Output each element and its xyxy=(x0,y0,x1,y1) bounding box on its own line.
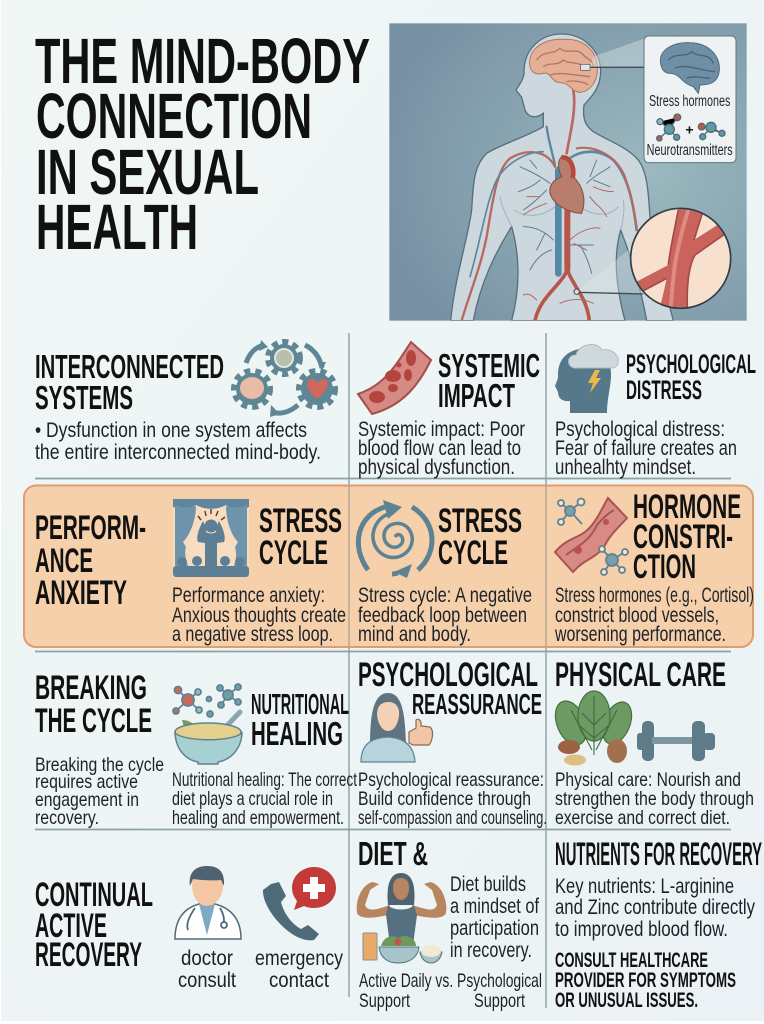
body text: Performance anxiety: xyxy=(172,583,325,607)
title: IN SEXUAL xyxy=(36,136,259,208)
body text: engagement in xyxy=(35,789,139,811)
heading: RECOVERY xyxy=(35,936,142,974)
heart xyxy=(550,157,584,213)
heading: CTION xyxy=(633,548,696,586)
icon: blood vessel xyxy=(358,342,431,414)
label: doctor consult: doctor xyxy=(181,946,233,970)
title: HEALTH xyxy=(36,191,198,263)
brain xyxy=(530,39,597,92)
heading xyxy=(626,349,756,405)
comparison labels: Active Daily vs. Psychological xyxy=(359,970,542,992)
zoom: artery close-up xyxy=(631,207,731,310)
heading: STRESS xyxy=(438,502,522,540)
icon: constricted vessel with molecules xyxy=(555,498,628,575)
heading: PERFORM- xyxy=(35,509,146,547)
heading xyxy=(35,348,224,416)
inset: stress hormones and neurotransmitters: Stress hormones xyxy=(649,93,731,110)
icon: gears brain heart xyxy=(234,340,335,417)
panel: nutritional healing: NUTRITIONAL xyxy=(251,689,349,721)
panel: continual active recovery xyxy=(35,866,343,992)
comparison labels: Support xyxy=(474,990,525,1012)
body text: Anxious thoughts create xyxy=(172,603,346,627)
body text xyxy=(555,417,737,479)
panel: interconnected systems xyxy=(35,340,335,464)
body text: Breaking the cycle xyxy=(35,754,164,776)
icon: dumbbell xyxy=(637,721,715,761)
body text: feedback loop between xyxy=(358,603,527,627)
heading xyxy=(35,509,146,612)
panel: diet and mindset xyxy=(357,835,542,1012)
body text: requires active xyxy=(35,771,138,793)
panel: performance anxiety highlight band xyxy=(24,486,754,652)
heading: SYSTEMIC xyxy=(438,347,540,384)
body text: Build confidence through xyxy=(358,788,531,810)
body text xyxy=(358,417,525,479)
panel: physical care xyxy=(549,656,754,829)
heading xyxy=(633,488,741,586)
body text: Stress cycle: A negative xyxy=(358,583,532,607)
comparison labels: Support xyxy=(359,990,410,1012)
heading: INTERCONNECTED xyxy=(35,348,224,385)
body text: unhealhty mindset. xyxy=(555,455,696,479)
heading xyxy=(35,669,152,740)
heading: REASSURANCE xyxy=(412,689,542,721)
heading xyxy=(358,656,542,721)
inset: stress hormones and neurotransmitters xyxy=(644,36,736,163)
comparison labels xyxy=(359,970,542,1012)
icon: molecules and bowl xyxy=(173,684,242,764)
icon: head with storm cloud xyxy=(555,345,618,413)
body text: Diet builds xyxy=(450,872,526,896)
title: CONNECTION xyxy=(36,80,312,152)
icon: doctor xyxy=(175,866,241,939)
body text: a negative stress loop. xyxy=(172,622,333,646)
panel: psychological distress xyxy=(555,345,756,479)
heading: DIET & xyxy=(358,835,428,872)
heading: THE CYCLE xyxy=(35,702,152,740)
icon: spinach and nuts xyxy=(549,691,637,766)
body text xyxy=(555,769,754,829)
body silhouette xyxy=(451,34,673,321)
label: emergency contact xyxy=(255,946,343,992)
heading: CYCLE xyxy=(438,534,508,572)
icon: person on stage xyxy=(173,499,249,577)
body text: Nutritional healing: The correct xyxy=(172,769,357,791)
body text: diet plays a crucial role in xyxy=(172,788,333,810)
label: emergency contact: emergency xyxy=(255,946,343,970)
panel: nutrients for recovery xyxy=(555,836,762,1012)
icon: woman with thumbs up xyxy=(361,693,433,762)
panel: psychological reassurance xyxy=(358,656,547,829)
body text: mind and body. xyxy=(358,622,471,646)
icon: phone and red cross bubble xyxy=(263,867,336,940)
heading: SYSTEMS xyxy=(35,379,133,416)
title xyxy=(35,25,370,263)
body text: recovery. xyxy=(35,807,99,829)
body text: Psychological reassurance: xyxy=(358,769,544,791)
panel: anatomical body illustration xyxy=(389,23,747,321)
heading xyxy=(438,347,540,414)
heading: ANXIETY xyxy=(35,574,127,612)
icon: spiral cycle xyxy=(358,500,432,578)
body text: healing and empowerment. xyxy=(172,807,344,829)
light beam to inset xyxy=(590,38,645,67)
inset: stress hormones and neurotransmitters: + xyxy=(685,122,694,138)
title: THE MIND-BODY xyxy=(35,25,370,97)
heading: CONTINUAL xyxy=(35,876,153,914)
body text: a mindset of xyxy=(450,894,539,918)
panel: systemic impact xyxy=(358,342,540,479)
heading xyxy=(251,689,349,752)
heading xyxy=(438,502,522,572)
heading: ACTIVE xyxy=(35,907,107,945)
blood vessels xyxy=(462,90,637,321)
body text xyxy=(554,583,754,646)
body text xyxy=(555,874,755,941)
heading: STRESS xyxy=(259,502,342,540)
body text: the entire interconnected mind-body. xyxy=(35,440,321,464)
heading xyxy=(35,876,153,974)
icon: strong woman with healthy meal xyxy=(357,873,446,963)
body text: participation xyxy=(450,916,539,940)
body text xyxy=(358,583,532,646)
body text: physical dysfunction. xyxy=(358,455,515,479)
body text: blood flow can lead to xyxy=(358,436,521,460)
panel: breaking the cycle xyxy=(35,669,164,829)
body text: Systemic impact: Poor xyxy=(358,417,525,441)
callout: consult healthcare provider xyxy=(555,949,736,1012)
panel: nutritional healing xyxy=(172,684,357,829)
label: doctor consult xyxy=(178,946,236,992)
heading: IMPACT xyxy=(438,377,515,414)
body text: self-compassion and counseling. xyxy=(358,807,547,829)
label: doctor consult: consult xyxy=(178,968,236,992)
heading: PSYCHOLOGICAL xyxy=(358,656,538,694)
body text xyxy=(35,418,321,464)
heading xyxy=(259,502,342,572)
light beam to zoom xyxy=(579,250,642,294)
body text xyxy=(358,769,547,829)
body text xyxy=(450,872,539,962)
heading: HEALING xyxy=(251,715,343,752)
grid dividers xyxy=(35,333,731,1008)
heading: ANCE xyxy=(35,542,93,580)
heading: CYCLE xyxy=(259,534,328,572)
heading: BREAKING xyxy=(35,669,147,707)
heading: DISTRESS xyxy=(626,375,702,405)
body text: in recovery. xyxy=(450,938,532,962)
body text: • Dysfunction in one system affects xyxy=(35,418,307,442)
body text xyxy=(172,769,357,829)
label: emergency contact: contact xyxy=(269,968,329,992)
body text xyxy=(172,583,346,646)
body text xyxy=(35,754,164,829)
